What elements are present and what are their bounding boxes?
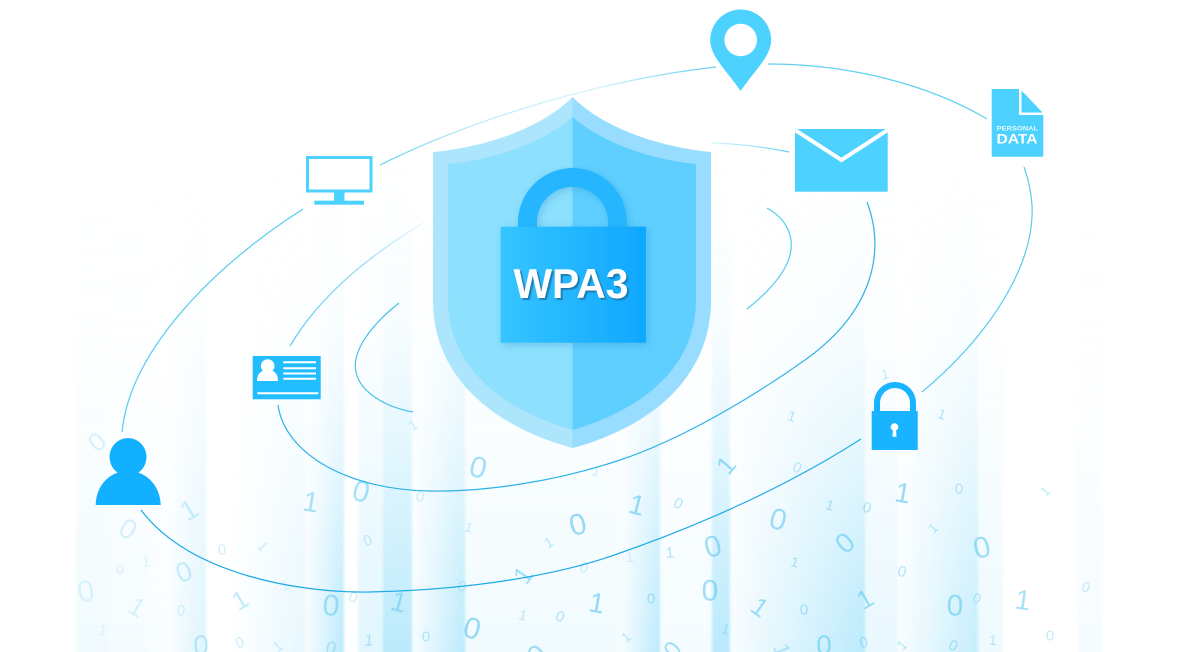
binary digits: 0 bbox=[970, 530, 994, 566]
binary digits: 1 bbox=[625, 488, 649, 522]
binary digits: 0 bbox=[701, 529, 725, 565]
binary digits: 0 bbox=[466, 450, 490, 486]
binary digits: 1 bbox=[936, 405, 949, 423]
icon: personal data document: PERSONAL bbox=[997, 126, 1038, 132]
icon: personal data document: DATA bbox=[996, 130, 1038, 146]
binary digits: 0 bbox=[456, 578, 468, 596]
binary digits: 1 bbox=[142, 554, 150, 570]
binary digits: 0 bbox=[947, 590, 963, 622]
binary digits: 0 bbox=[75, 574, 97, 610]
binary digits: 1 bbox=[463, 518, 475, 536]
shield outer left bbox=[433, 97, 572, 448]
binary digits: 1 bbox=[925, 519, 942, 536]
icon: ID card bbox=[253, 356, 321, 399]
binary digits: 1 bbox=[893, 476, 913, 510]
binary digits: 1 bbox=[618, 628, 634, 646]
binary digits: 0 bbox=[233, 634, 247, 652]
binary digits: 0 bbox=[414, 488, 426, 506]
binary digits: 1 bbox=[254, 538, 272, 554]
binary digits: 1 bbox=[625, 549, 635, 565]
binary digits: 0 bbox=[670, 495, 686, 513]
background: vertical light bands bbox=[76, 326, 1102, 652]
binary digits: 0 bbox=[577, 559, 591, 577]
binary digits bbox=[75, 365, 1093, 652]
binary digits: 0 bbox=[1046, 628, 1054, 644]
binary digits: 0 bbox=[361, 532, 375, 550]
binary digits: 0 bbox=[702, 574, 718, 608]
binary digits: 0 bbox=[217, 541, 227, 559]
orbit: outer ring top left bbox=[380, 67, 716, 165]
binary digits: 1 bbox=[720, 620, 732, 638]
binary digits: 1 bbox=[851, 582, 879, 616]
binary digits: 1 bbox=[1037, 482, 1054, 499]
binary digits: 0 bbox=[647, 590, 655, 608]
orbit: outer ring left bbox=[122, 209, 303, 432]
binary digits: 0 bbox=[829, 526, 861, 560]
binary digits: 1 bbox=[988, 632, 998, 648]
orbit: middle ring bottom bbox=[278, 202, 875, 491]
binary digits: 1 bbox=[123, 590, 151, 624]
binary digits: 0 bbox=[422, 628, 430, 646]
binary digits: 1 bbox=[665, 544, 675, 562]
icon: small padlock bbox=[872, 385, 918, 450]
binary digits: 1 bbox=[880, 365, 890, 383]
binary digits: 1 bbox=[745, 591, 775, 623]
icon: personal data document bbox=[992, 89, 1043, 157]
orbit: outer ring right bbox=[922, 167, 1032, 392]
binary digits: 1 bbox=[507, 560, 539, 590]
padlock body bbox=[501, 227, 646, 343]
icon: envelope bbox=[795, 129, 888, 192]
orbit: inner ring right bbox=[747, 208, 791, 309]
binary digits: 1 bbox=[710, 450, 742, 480]
binary digits: 0 bbox=[955, 480, 963, 498]
icon: monitor bbox=[308, 158, 371, 205]
binary digits: 0 bbox=[1080, 578, 1093, 596]
binary digits: 1 bbox=[541, 534, 557, 552]
binary digits: 0 bbox=[460, 611, 484, 647]
binary digits: 1 bbox=[406, 416, 421, 434]
shield outer right bbox=[572, 97, 711, 448]
binary digits: 0 bbox=[790, 459, 804, 477]
binary digits: 1 bbox=[786, 407, 798, 425]
binary digits: 1 bbox=[590, 462, 602, 480]
binary digits: 1 bbox=[364, 632, 374, 650]
binary digits: 0 bbox=[82, 426, 112, 458]
orbit: outer ring top right bbox=[768, 64, 987, 119]
padlock shackle bbox=[528, 178, 618, 232]
WPA3 label: WPA3 bbox=[514, 260, 628, 307]
binary digits: 0 bbox=[114, 512, 142, 546]
binary digits: 1 bbox=[824, 496, 836, 514]
binary digits: 1 bbox=[279, 576, 292, 594]
binary digits: 0 bbox=[566, 507, 590, 543]
binary digits: 1 bbox=[97, 621, 109, 639]
binary digits: 1 bbox=[517, 606, 529, 624]
shield inner right bbox=[572, 117, 696, 430]
binary digits: 1 bbox=[301, 485, 321, 519]
binary digits: 1 bbox=[1013, 584, 1033, 616]
binary digits: 0 bbox=[321, 589, 341, 623]
binary digits: 0 bbox=[858, 634, 870, 652]
binary digits: 0 bbox=[553, 608, 567, 626]
binary digits: 0 bbox=[766, 502, 790, 538]
binary digits: 0 bbox=[800, 602, 808, 618]
binary digits: 0 bbox=[861, 499, 873, 517]
orbit: middle ring to envelope bbox=[712, 143, 789, 152]
shield with padlock bbox=[433, 97, 711, 448]
binary digits: 0 bbox=[349, 474, 373, 510]
orbit: inner ring left bbox=[355, 303, 413, 412]
shield inner left bbox=[448, 117, 572, 430]
binary digits: 0 bbox=[970, 589, 984, 607]
binary digits: 0 bbox=[896, 563, 908, 581]
orbit: middle ring upper left bbox=[290, 223, 423, 346]
binary digits: 0 bbox=[176, 602, 186, 620]
orbit: outer ring bottom bbox=[141, 439, 861, 592]
binary digits: 1 bbox=[226, 583, 254, 617]
binary digits: 0 bbox=[346, 589, 360, 607]
icon: user bbox=[96, 438, 161, 505]
binary digits: 0 bbox=[171, 555, 197, 589]
binary digits: 0 bbox=[116, 561, 124, 577]
binary digits: 1 bbox=[789, 553, 801, 571]
icon: location pin bbox=[710, 10, 771, 91]
binary digits: 1 bbox=[587, 586, 607, 620]
binary digits: 1 bbox=[175, 493, 203, 527]
binary digits: 1 bbox=[387, 585, 411, 619]
